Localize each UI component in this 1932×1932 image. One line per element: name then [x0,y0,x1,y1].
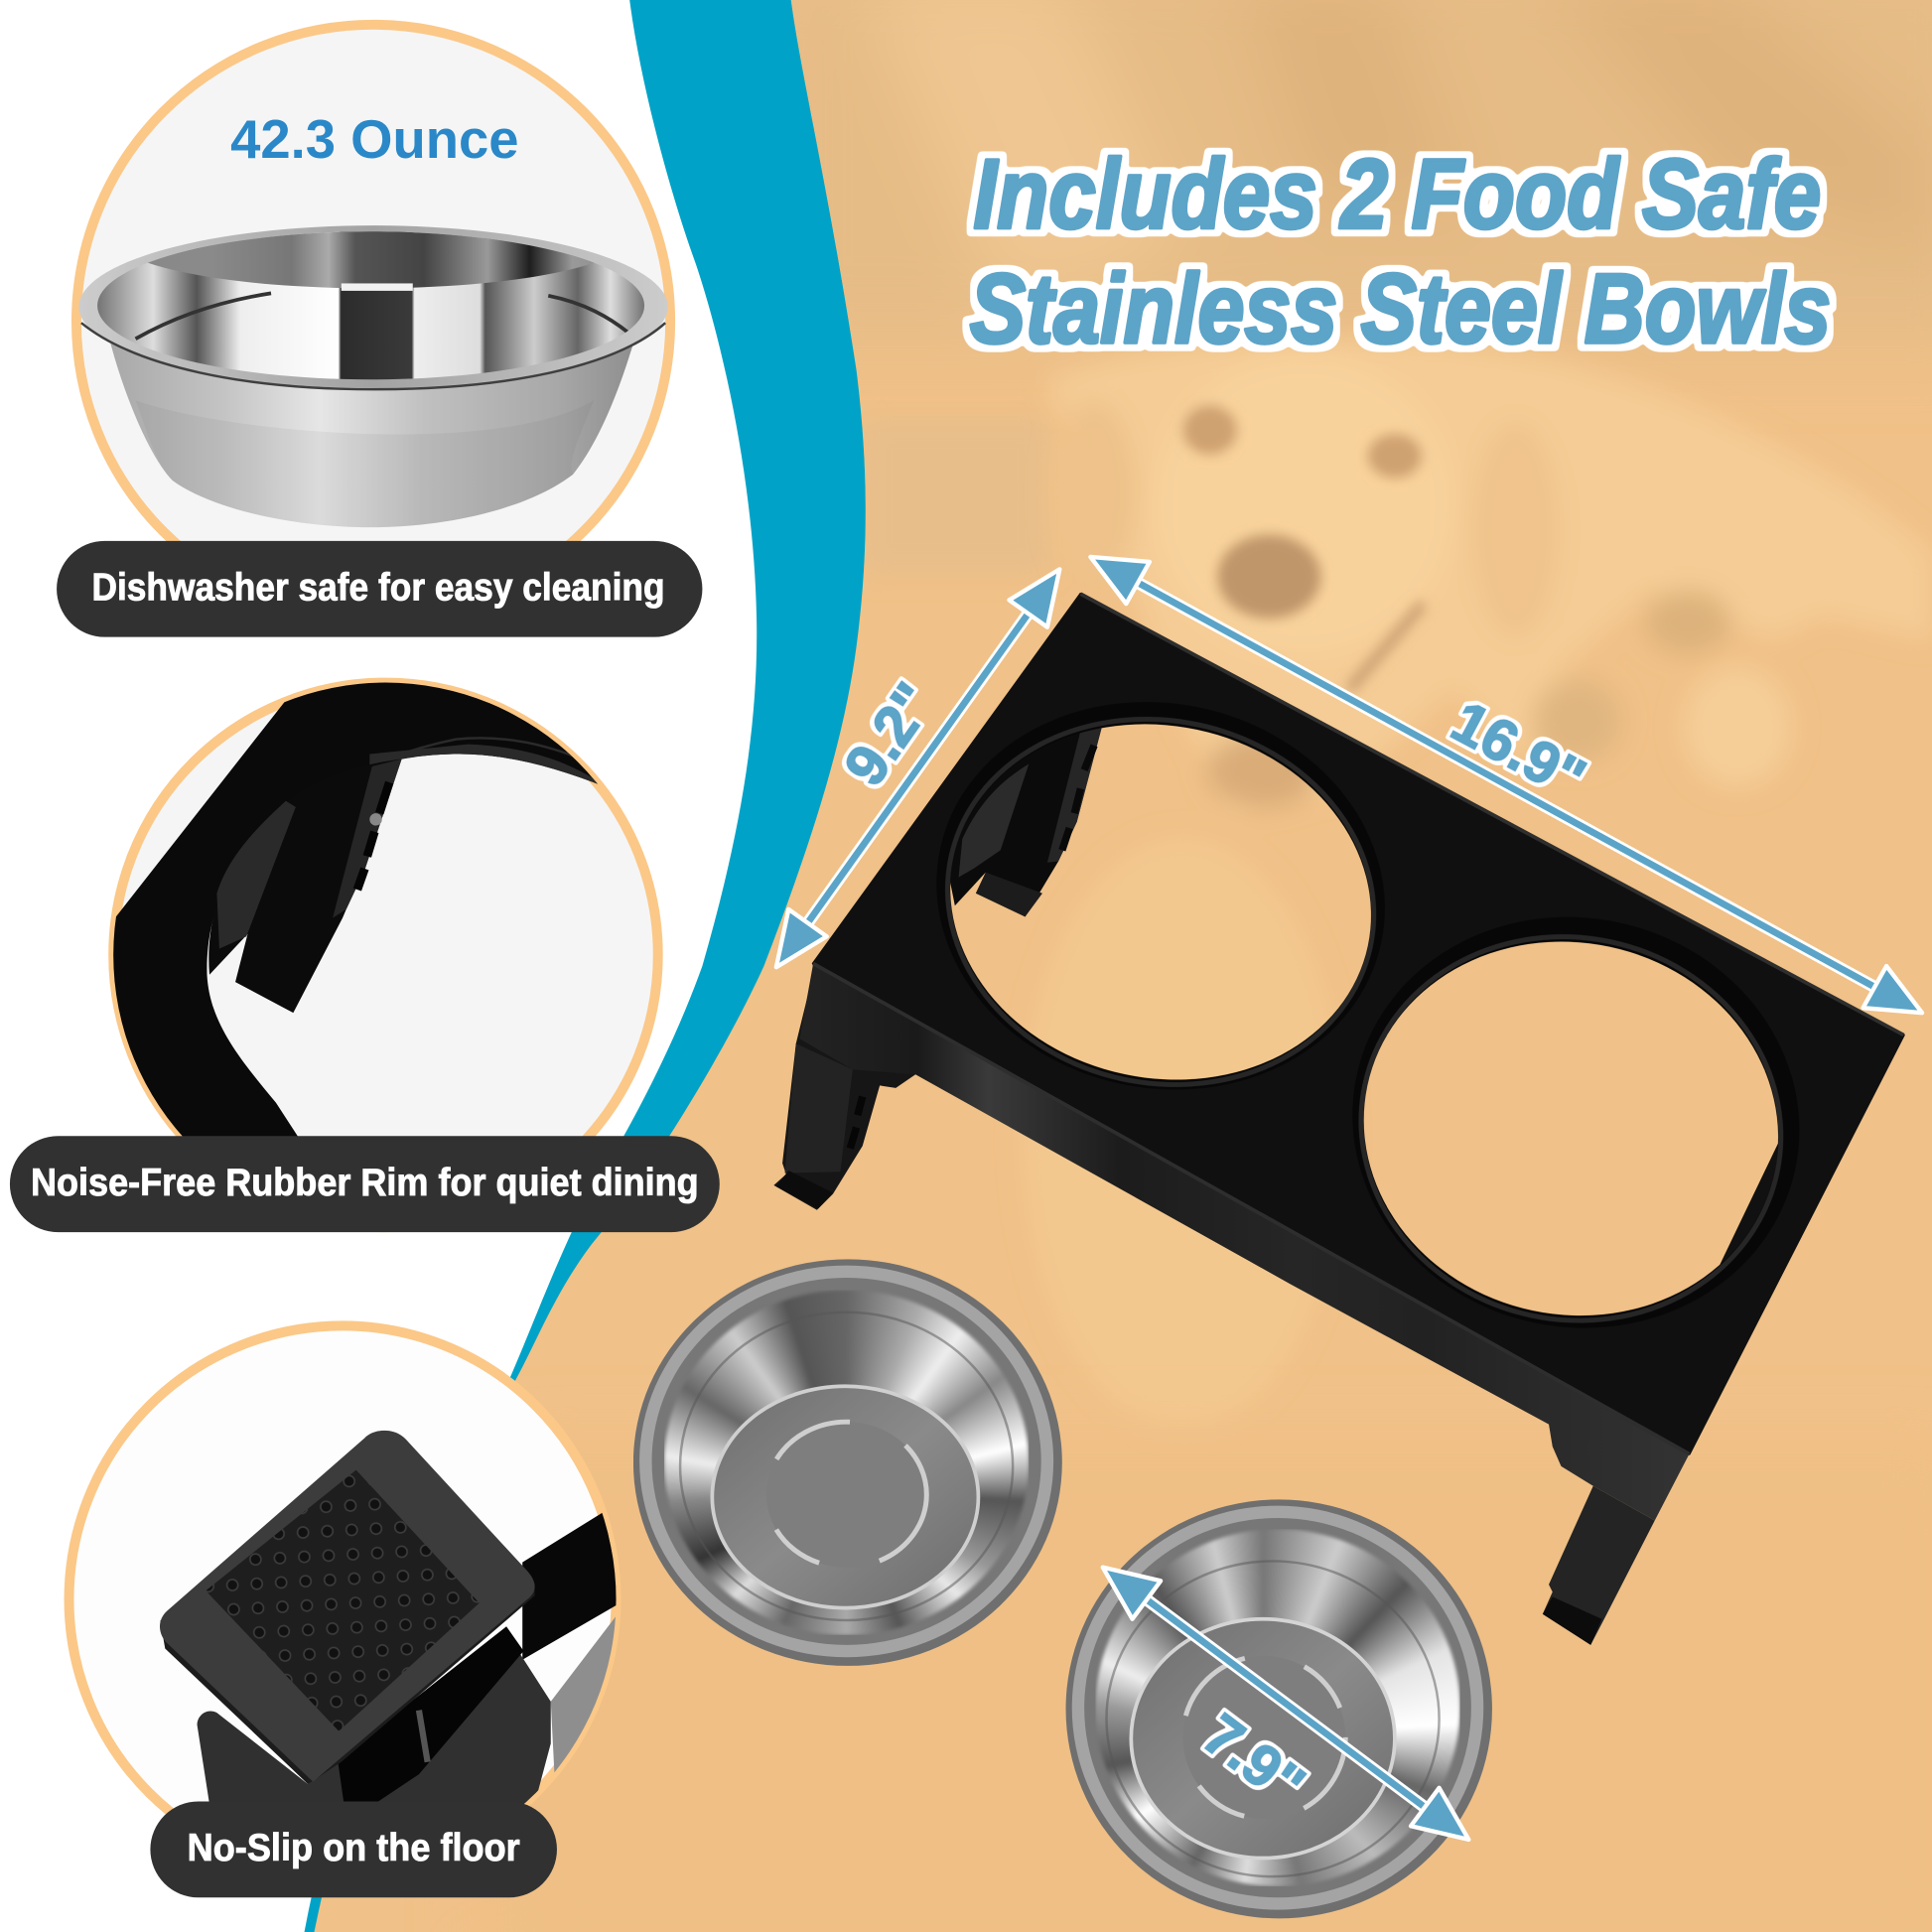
leg seen through the hole [208,759,402,1013]
title [970,140,1831,364]
caption pill: noise-free: Noise-Free Rubber Rim for quiet dining [31,1162,699,1204]
steel bowl 2 [1066,1499,1492,1918]
title: Includes 2 Food Safe [973,140,1821,250]
dog body [1056,341,1928,810]
rubber foot close-up [160,1431,622,1836]
black frame close-up [113,683,598,1136]
large steel bowl [79,225,668,528]
rear rim crescent in hole [1721,1141,1789,1272]
capacity label: 42.3 Ounce [230,109,518,170]
steel bowl 1 [633,1259,1062,1666]
floor left of dog [863,419,1047,573]
dog face features [1182,405,1423,690]
right front leg [1543,1486,1655,1645]
panel: bowl capacity circle [71,20,675,541]
caption pill: no-slip: No-Slip on the floor [188,1827,520,1869]
dimension arrow: 7.9 inch bowl diameter: 7.9" [1191,1702,1316,1818]
bowl rim rings [900,661,1838,1369]
panel: non-slip foot circle [69,1325,622,1872]
caption pill: noise-free [10,1136,720,1232]
dimension arrow: 16.9 inch width [1090,557,1922,1013]
blanket [763,0,1932,345]
left front leg [773,973,915,1210]
lower floor [492,1453,1932,1932]
caption pill: dishwasher: Dishwasher safe for easy cleaning [91,566,665,609]
dimension arrow: 7.9 inch bowl diameter [1103,1568,1468,1840]
caption pill: no-slip [150,1801,557,1897]
dimension arrow: 9.2 inch depth: 9.2" [832,671,947,797]
panel: rubber rim circle [98,653,658,1227]
dimension arrow: 16.9 inch width: 16.9" [1442,689,1595,812]
table top plate [813,594,1903,1453]
elevated black feeder stand [773,594,1903,1645]
plate edge highlights [813,594,1903,1453]
caption pill: dishwasher [57,541,702,637]
rear leg seen through hole [946,727,1102,916]
dimension arrow: 9.2 inch depth [776,569,1059,967]
front skirt [799,964,1690,1520]
